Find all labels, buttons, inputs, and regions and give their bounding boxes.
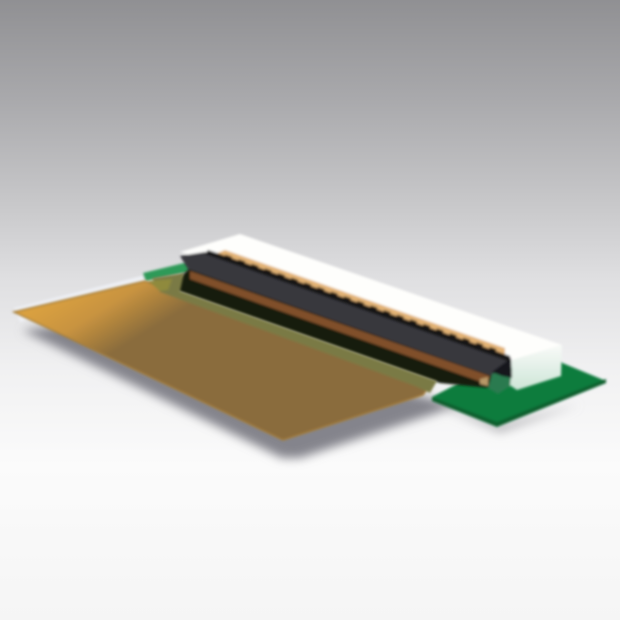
- film: olive reinforcement strip: [152, 273, 437, 393]
- cavity: dark interior: [172, 268, 500, 388]
- actuator: dark top edge: [205, 250, 511, 362]
- circuit board: [143, 262, 606, 427]
- board: rear sliver: [143, 262, 192, 281]
- housing: front face: [508, 345, 562, 390]
- highlight behind film: [14, 276, 146, 322]
- connector end: dark notch: [492, 358, 512, 378]
- contact teeth along the housing edge: [225, 256, 500, 352]
- board: front section: [432, 362, 606, 425]
- flexible film: [14, 273, 437, 440]
- contacts: brown strip: [190, 271, 490, 384]
- board: edge: [432, 379, 606, 427]
- actuator: black bar: [180, 252, 510, 377]
- contact row: orange edge: [215, 250, 505, 355]
- connector end: pale contact: [480, 377, 488, 386]
- housing: white top: [180, 234, 562, 360]
- film: inner tone near strip: [148, 279, 172, 291]
- connector: [172, 234, 562, 394]
- film: amber sheet: [14, 281, 428, 440]
- cast shadow: [22, 322, 580, 458]
- connector end: green shaded: [488, 368, 512, 394]
